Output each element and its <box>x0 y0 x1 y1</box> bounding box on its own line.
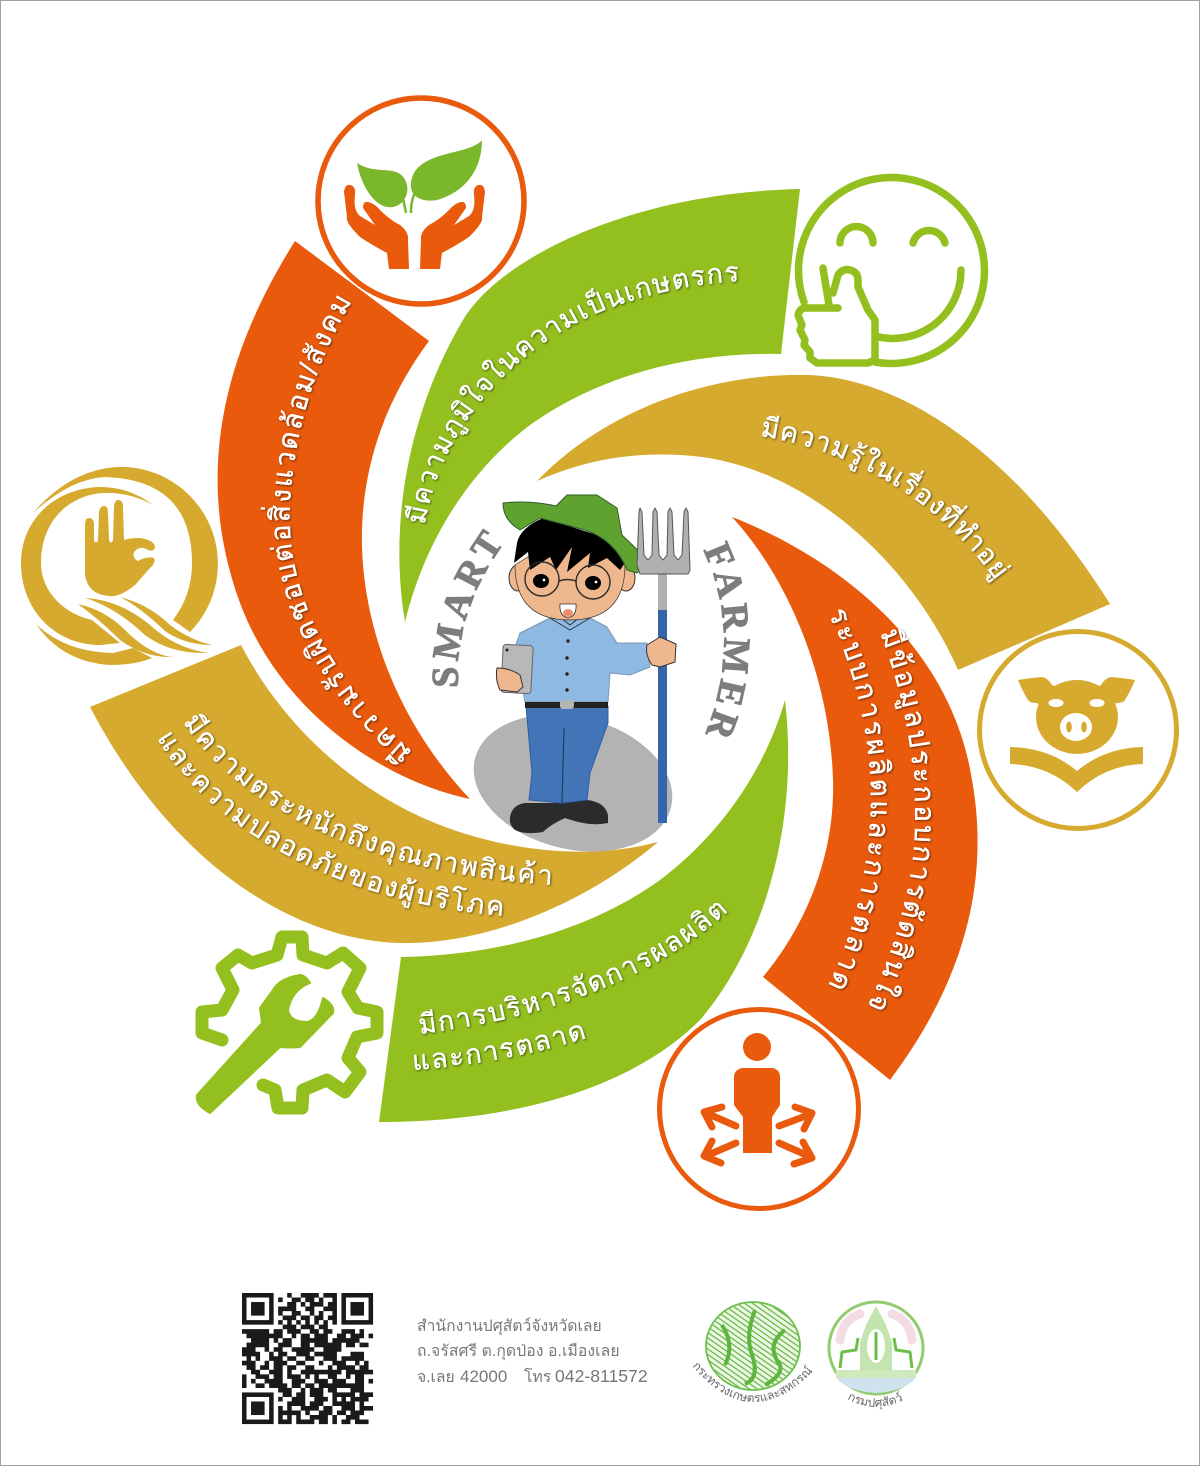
hand on fork <box>647 637 676 667</box>
mouth <box>560 604 576 618</box>
panel: environmental and social responsibility <box>218 241 470 799</box>
panel: pride in being a farmer <box>399 189 800 622</box>
smart farmer arc title <box>432 528 750 737</box>
panel: knowledge of the work: มีความรู้ในเรื่องที่ทำอยู่ <box>762 416 1014 585</box>
panel: data for decisions: มีข้อมูลประกอบการตัดสินใจ <box>868 629 934 1012</box>
qr code <box>242 1295 373 1422</box>
ears and head <box>509 565 527 591</box>
glasses and eyes <box>525 562 610 599</box>
phone and hand <box>501 644 533 694</box>
panel: data for decisions <box>732 517 978 1080</box>
panel: quality and consumer safety: มีความตระหนักถึงคุณภาพสินค้า <box>184 714 553 887</box>
icon: quality OK hand <box>21 467 218 665</box>
panel: production and marketing management <box>379 700 788 1122</box>
seal: ministry of agriculture: กระทรวงเกษตรและสหกรณ์ <box>692 1363 812 1402</box>
office address: สำนักงานปศุสัตว์จังหวัดเลย <box>417 1317 602 1336</box>
office address: จ.เลย <box>417 1369 455 1386</box>
seal: department of livestock development: กรมปศุสัตว์ <box>848 1391 902 1410</box>
trousers <box>526 706 608 803</box>
panel: quality and consumer safety: และความปลอดภัยของผู้บริโภค <box>158 732 504 918</box>
panel: production and marketing management: และการตลาด <box>414 1025 588 1072</box>
farmer character <box>459 495 690 871</box>
panel: production and marketing management: มีการบริหารจัดการผลผลิต <box>419 902 729 1036</box>
icon: person with arrows <box>660 1010 858 1208</box>
panel: pride in being a farmer: มีความภูมิใจในความเป็นเกษตรกร <box>404 266 740 525</box>
icon: hands holding plant <box>318 98 524 304</box>
hair <box>514 518 627 572</box>
office address <box>417 1317 648 1386</box>
panel: knowledge of the work <box>537 374 1110 670</box>
office address: 42000 <box>460 1367 507 1386</box>
pitchfork <box>637 508 690 823</box>
smart farmer arc title: FARMER <box>703 540 750 737</box>
shirt <box>515 618 650 702</box>
shoes <box>510 800 608 833</box>
belt <box>525 702 608 708</box>
office address: โทร <box>524 1367 556 1386</box>
office address: ถ.จรัสศรี ต.กุดป่อง อ.เมืองเลย <box>417 1342 620 1361</box>
seal: ministry of agriculture <box>692 1301 812 1402</box>
seal: department of livestock development <box>828 1300 924 1410</box>
panel: quality and consumer safety <box>90 645 658 944</box>
ground shadow <box>459 695 687 871</box>
icon: smiling face with thumbs up <box>798 177 984 363</box>
smart farmer arc title: SMART <box>432 528 502 686</box>
panel: environmental and social responsibility: มีความรับผิดชอบต่อสิ่งแวดล้อม/สังคม <box>260 295 413 767</box>
office address: 042-811572 <box>555 1366 648 1386</box>
icon: pig and book <box>980 632 1176 828</box>
panel: data for decisions: ระบบการผลิตและการตลาด <box>828 609 895 992</box>
hat <box>503 495 650 573</box>
icon: gear and wrench <box>197 937 377 1113</box>
